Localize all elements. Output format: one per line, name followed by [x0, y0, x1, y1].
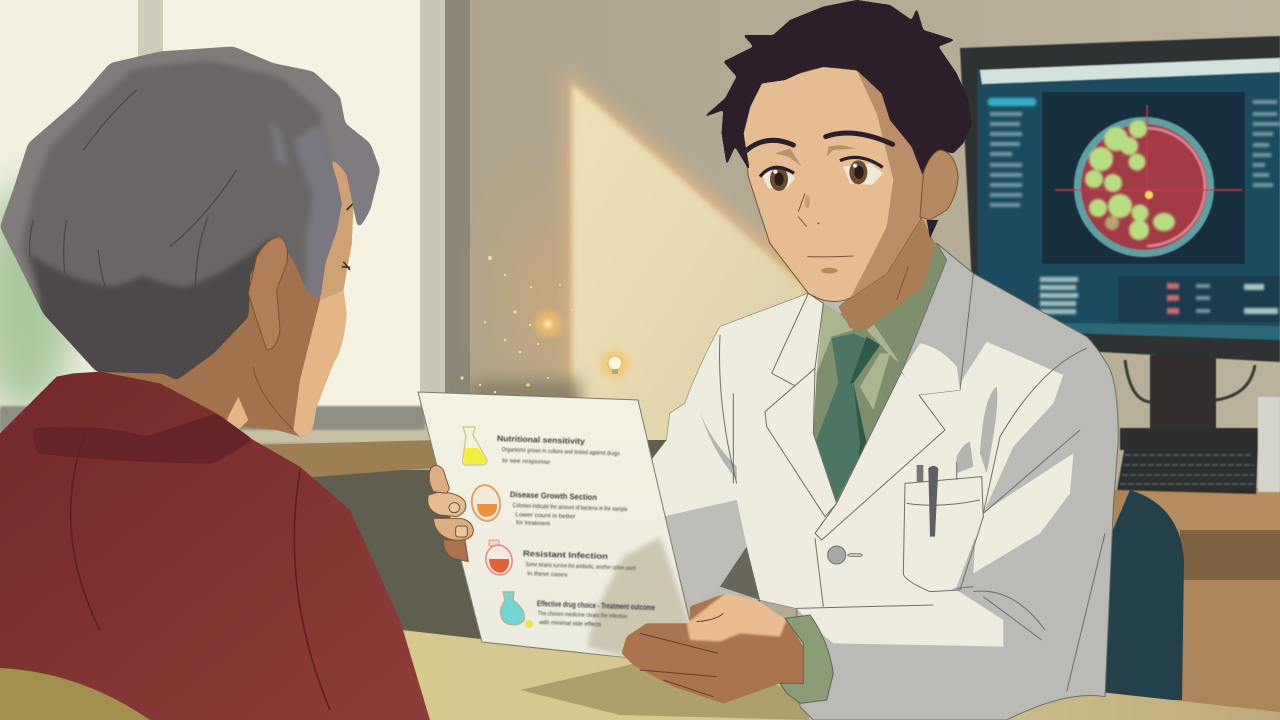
chest pocket and pens [903, 462, 983, 592]
hair lower shadow [30, 237, 277, 380]
hair shapes [0, 47, 380, 380]
screen [978, 58, 1280, 340]
section 3: Some strains survive the antibiotic, another option used [525, 562, 636, 572]
section 1: Organisms grown in culture and tested against drugs [501, 447, 620, 457]
bottom strip [978, 322, 1280, 340]
side lists [988, 98, 1280, 314]
doctor head [703, 0, 972, 330]
patient eye lashes [342, 203, 353, 270]
bezel [960, 36, 1280, 362]
section 2: Lower count is better [515, 512, 575, 520]
patient hair [0, 47, 380, 380]
lightbulb icon [595, 344, 635, 384]
warm glow on wall [455, 130, 635, 470]
patient face front [320, 153, 353, 300]
monitor stand [1120, 355, 1260, 450]
coat sunlit left [650, 293, 1063, 608]
petri dish [1055, 105, 1242, 257]
chair back [1095, 490, 1184, 700]
flask: red [483, 540, 515, 578]
title bar [980, 58, 1280, 84]
side lock [270, 118, 342, 300]
desk and cabinet [1110, 488, 1280, 720]
coat lapels [765, 243, 973, 540]
lapel sun patch [902, 343, 960, 395]
sheet of paper [418, 392, 690, 658]
doctor body [650, 243, 1118, 720]
particles [460, 256, 641, 393]
patient red shirt [0, 372, 430, 720]
paper shadow [587, 537, 690, 658]
section 2 [509, 490, 629, 530]
hair outer light [0, 47, 380, 380]
bacterial colonies [1085, 120, 1175, 240]
section 1: to see response [502, 458, 551, 466]
flask: orange [469, 483, 503, 523]
doctor neck [838, 213, 935, 330]
section 4: with minimal side effects [538, 620, 601, 628]
section 1: Nutritional sensitivity [497, 434, 586, 446]
coat base [650, 243, 1118, 720]
centre panel [1042, 92, 1245, 264]
pen shadows on coat [700, 387, 997, 480]
coat button [828, 546, 862, 564]
doctor face [743, 67, 930, 302]
table [402, 630, 1280, 720]
patient [0, 47, 430, 720]
flask: teal [501, 592, 533, 628]
patient jaw crease [253, 367, 293, 430]
patient ear [248, 237, 287, 350]
doctor shirt [813, 243, 947, 503]
section 2: Disease Growth Section [510, 490, 597, 502]
section 2: for treatment [516, 520, 550, 527]
section 1 [496, 434, 620, 468]
gap between arm and body [720, 547, 760, 600]
coat sunlit sleeve patches [797, 453, 1073, 647]
section 2: Colonies indicate the amount of bacteria in the sample [512, 503, 628, 513]
hair strands [30, 90, 237, 320]
doctor right hand and cuff [622, 593, 833, 703]
light beam on wall [566, 70, 812, 450]
doctor hair [703, 0, 972, 177]
finger lines [640, 613, 723, 697]
patient neck and face [100, 153, 353, 437]
glow [530, 306, 566, 342]
doctor nose and mouth [798, 193, 908, 300]
doctor left hand fingers holding paper [428, 465, 473, 562]
window [0, 0, 470, 443]
centre light [1145, 191, 1153, 199]
section 3: Resistant Infection [523, 549, 608, 561]
doctor ear [920, 150, 958, 220]
face shade [850, 70, 930, 298]
section 3: in these cases [527, 571, 567, 579]
section 3 [522, 549, 636, 581]
section 4: The chosen medicine clears the infection [538, 611, 628, 620]
garden seen through window [0, 185, 75, 415]
flask: yellow [462, 427, 487, 465]
hair main [20, 60, 342, 380]
shirt collar shadow [32, 413, 253, 463]
shirt folds [71, 433, 330, 710]
patient chair corner [0, 668, 150, 720]
computer monitor [960, 36, 1280, 494]
doctor tie [815, 333, 880, 503]
window sill and lower wall [250, 380, 760, 650]
doctor eyes [760, 157, 883, 191]
sparkles [460, 256, 641, 393]
brow shadows [775, 145, 857, 167]
paper text [496, 434, 655, 630]
white device [1258, 397, 1280, 492]
monitor cables [1125, 360, 1255, 402]
section 4: Effective drug choice - Treatment outcome [537, 599, 655, 612]
sleeve shadow [663, 500, 747, 605]
hand [622, 593, 803, 703]
keyboard [1117, 445, 1258, 494]
doctor eyebrows [746, 133, 893, 151]
coat seams [720, 335, 1105, 692]
hair under ear [927, 220, 938, 238]
patient sunlit cheek [227, 290, 347, 437]
section 4 [536, 599, 655, 630]
bottom data panel [1118, 276, 1280, 322]
green cuff [780, 615, 833, 703]
table shadow [520, 660, 810, 720]
shirt light parts [817, 303, 900, 410]
front lock [328, 123, 380, 230]
